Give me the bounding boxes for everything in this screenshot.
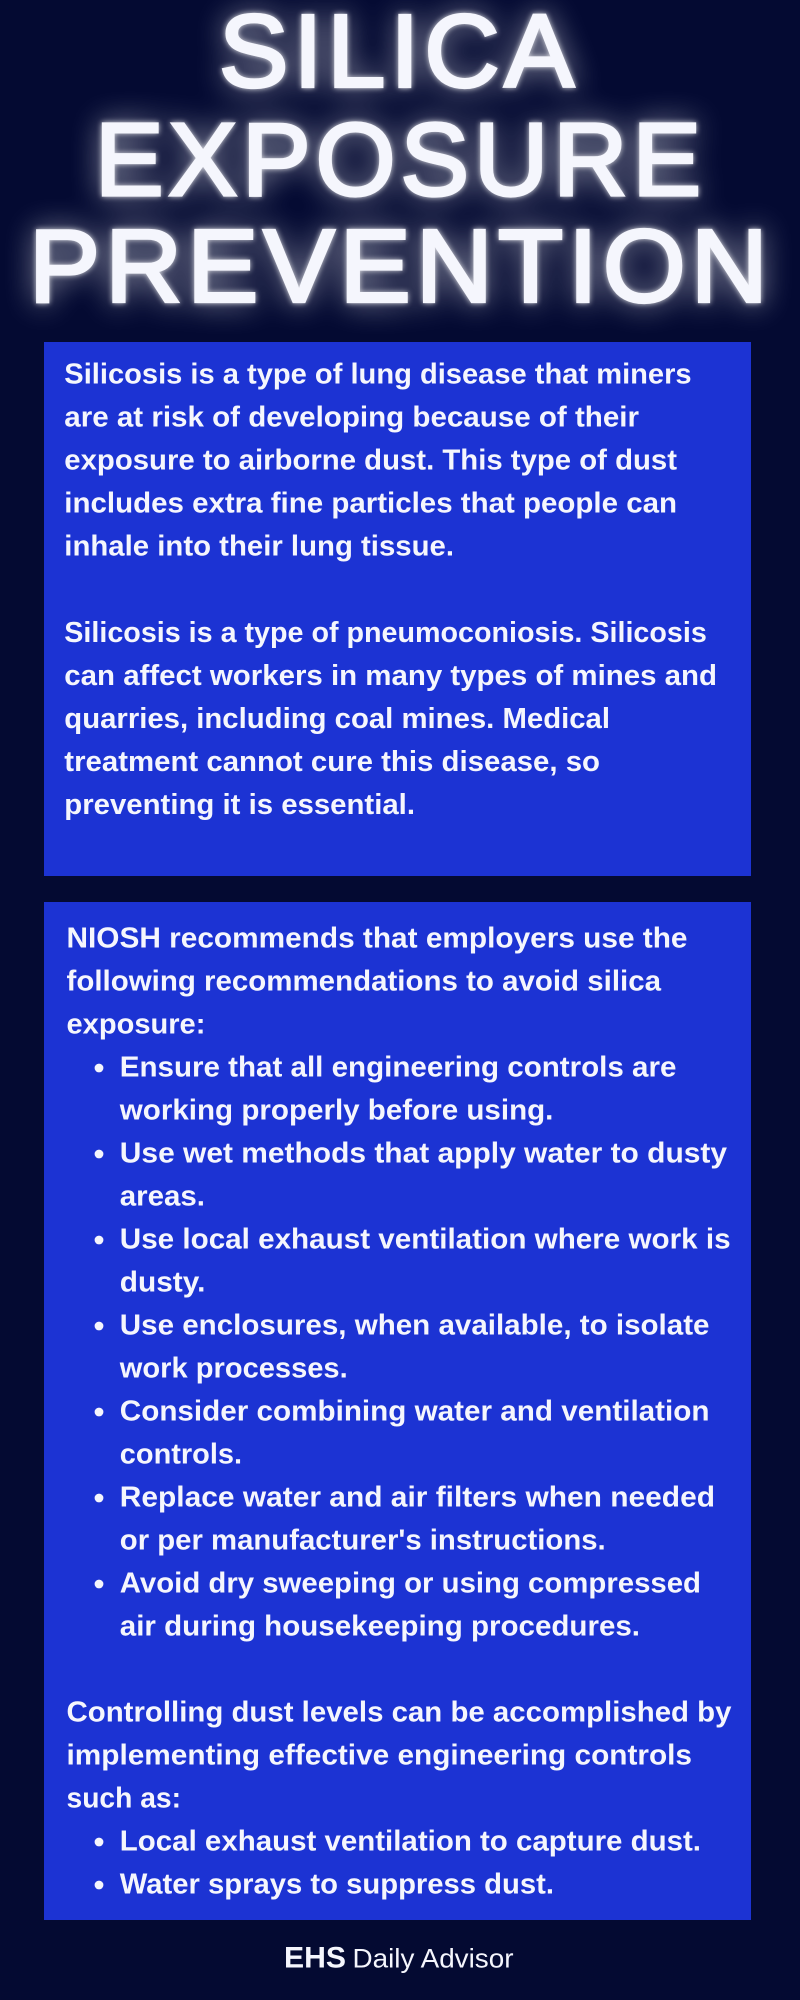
bullet: avoid dry sweeping: Avoid dry sweeping or using compressed [120,1567,701,1599]
text block: what silicosis is [64,359,692,563]
text block: pneumoconiosis and prevention [64,617,717,821]
bullet: avoid dry sweeping [95,1567,701,1642]
bullet: enclosures: work processes. [119,1352,348,1384]
text block: what silicosis is: exposure to airborne dust. This type of dust [64,445,677,477]
bullet: enclosures [95,1309,710,1384]
text block: controlling dust levels: implementing effective engineering controls [66,1739,692,1771]
bullet list: engineering controls: Local exhaust ventilation to capture dust. [120,1825,701,1857]
text block: controlling dust levels: such as: [66,1782,181,1814]
panel: silicosis overview [44,342,751,876]
footer logo: EHS Daily Advisor [284,1942,514,1975]
title: PREVENTION [29,208,773,324]
text block: NIOSH intro: NIOSH recommends that employers use the [66,922,687,954]
bullet: local exhaust ventilation: Use local exhaust ventilation where work is [120,1223,731,1255]
text block: what silicosis is: includes extra fine particles that people can [64,488,677,520]
bullet list: engineering controls: Water sprays to suppress dust. [120,1868,554,1900]
bullet: engineering controls [95,1051,676,1126]
text block: NIOSH intro [66,922,687,1040]
text block: pneumoconiosis and prevention: quarries, including coal mines. Medical [64,703,610,735]
text block: what silicosis is: are at risk of developing because of their [64,402,639,434]
panel: recommendations [44,902,751,1920]
footer logo: EHS Daily Advisor: EHS [284,1942,346,1975]
text block: controlling dust levels [66,1696,732,1814]
text block: NIOSH intro: exposure: [66,1008,205,1040]
bullet: wet methods [95,1137,727,1212]
bullet: combined controls: Consider combining water and ventilation [120,1395,710,1427]
title [29,0,773,324]
title: EXPOSURE [95,102,706,217]
text block: controlling dust levels: Controlling dust levels can be accomplished by [66,1696,732,1728]
bullet: local exhaust ventilation: dusty. [120,1266,205,1298]
bullet: replace filters: or per manufacturer's instructions. [120,1524,606,1556]
text block: pneumoconiosis and prevention: can affect workers in many types of mines and [64,660,717,692]
bullet: local exhaust ventilation [95,1223,731,1298]
bullet: wet methods: areas. [120,1180,205,1212]
bullet: avoid dry sweeping: air during housekeeping procedures. [120,1610,640,1642]
bullet: wet methods: Use wet methods that apply water to dusty [120,1137,727,1169]
footer logo: EHS Daily Advisor: Daily Advisor [352,1944,514,1974]
bullet: replace filters: Replace water and air filters when needed [120,1481,715,1513]
bullet: combined controls: controls. [120,1438,242,1470]
text block: pneumoconiosis and prevention: Silicosis is a type of pneumoconiosis. Silicosis [64,617,707,649]
bullet list: NIOSH recommendations [95,1051,731,1642]
bullet: replace filters [95,1481,715,1556]
text block: what silicosis is: Silicosis is a type of lung disease that miners [64,359,692,391]
bullet: engineering controls: Ensure that all engineering controls are [120,1051,676,1083]
bullet: engineering controls: working properly before using. [119,1094,553,1126]
bullet: enclosures: Use enclosures, when available, to isolate [120,1309,710,1341]
text block: what silicosis is: inhale into their lung tissue. [64,531,454,563]
bullet: combined controls [95,1395,710,1470]
text block: pneumoconiosis and prevention: treatment cannot cure this disease, so [64,746,600,778]
text block: pneumoconiosis and prevention: preventing it is essential. [64,789,415,821]
text block: NIOSH intro: following recommendations to avoid silica [66,965,662,997]
bullet list: engineering controls [95,1825,701,1900]
